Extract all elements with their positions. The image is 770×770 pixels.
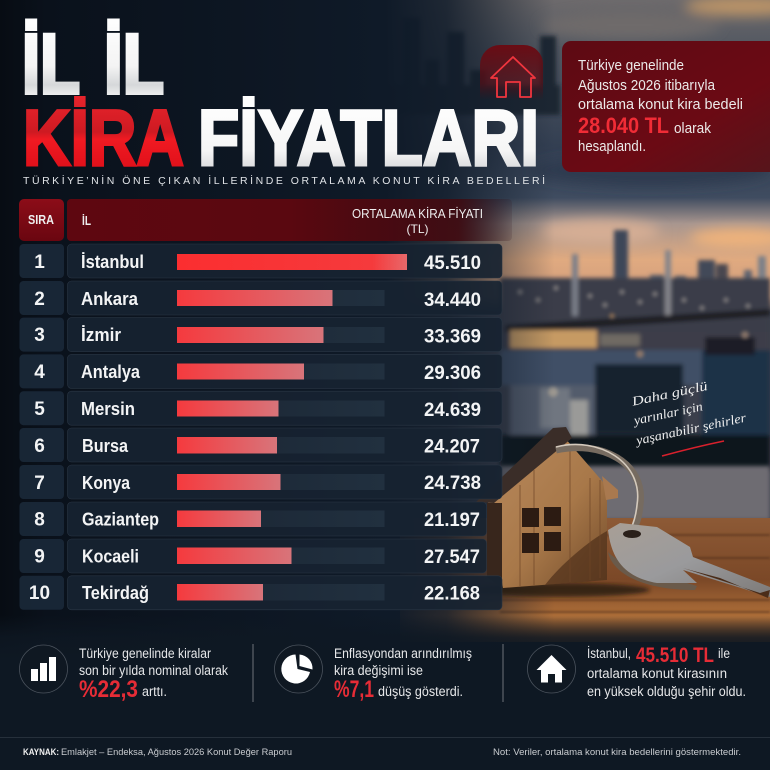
- row 9 Kocaeli: [20, 539, 486, 573]
- title line: İL İL: İL: [22, 17, 80, 111]
- row 3 İzmir: İzmir: [81, 325, 121, 345]
- ranking table: [20, 244, 502, 610]
- row 3 İzmir: 3: [34, 325, 45, 346]
- stat 2: real rent change: [274, 645, 472, 703]
- icon: pie chart: [274, 645, 322, 693]
- title: [22, 17, 539, 182]
- table header: ORTALAMA KİRA FİYATI: [352, 207, 483, 221]
- row 3 İzmir: 33.369: [424, 326, 481, 348]
- handwritten slogan: Daha güçlü: [629, 378, 709, 409]
- table header: [19, 199, 512, 241]
- row 8 Gaziantep: Gaziantep: [82, 510, 159, 530]
- callout: national average: ortalama konut kira bedeli: [578, 97, 743, 113]
- stat 3: highest city: ile: [718, 646, 730, 661]
- row 6 Bursa: [20, 428, 502, 462]
- row 4 Antalya: 4: [34, 362, 45, 383]
- stat 3: highest city: 45.510 TL: [636, 644, 714, 667]
- title line: İL İL: İL: [104, 17, 164, 111]
- title line: KİRA FİYATLARI: [23, 93, 539, 182]
- row 4 Antalya: 29.306: [424, 362, 481, 384]
- footer: source: Emlakjet – Endeksa, Ağustos 2026 Konut Değer Raporu: [61, 747, 292, 758]
- callout: national average: Ağustos 2026 itibarıyla: [578, 78, 716, 94]
- city lights: [517, 285, 751, 397]
- row 2 Ankara: 2: [34, 289, 45, 310]
- row 7 Konya: 7: [34, 473, 45, 494]
- table header: İL: [82, 213, 91, 228]
- stat 3: highest city: ortalama konut kirasının: [587, 666, 727, 681]
- row 4 Antalya: [20, 354, 502, 388]
- footer: note: Not: Veriler, ortalama konut kira bedellerini göstermektedir.: [493, 747, 741, 758]
- callout: national average: [562, 41, 770, 172]
- row 5 Mersin: 5: [34, 399, 45, 420]
- key: [608, 523, 770, 598]
- row 6 Bursa: 6: [34, 436, 45, 457]
- footer: source: KAYNAK:: [23, 747, 59, 758]
- row 5 Mersin: [20, 391, 502, 425]
- handwritten slogan: yarınlar için: [630, 398, 704, 428]
- callout: national average: 28.040 TL: [578, 113, 669, 138]
- stat 1: nominal rent increase: %22,3: [79, 676, 138, 703]
- row 8 Gaziantep: 8: [34, 510, 45, 530]
- callout: national average: hesaplandı.: [578, 139, 646, 155]
- row 10 Tekirdağ: 10: [29, 583, 50, 604]
- row 5 Mersin: Mersin: [81, 399, 135, 419]
- photo: wooden house and key: [470, 427, 770, 598]
- subtitle: TÜRKİYE’NİN ÖNE ÇIKAN İLLERİNDE ORTALAMA KONUT KİRA BEDELLERİ: [23, 174, 545, 187]
- row 10 Tekirdağ: Tekirdağ: [82, 583, 149, 603]
- icon: bar chart: [20, 645, 68, 693]
- stat 2: real rent change: %7,1: [334, 676, 374, 703]
- stat 3: highest city: en yüksek olduğu şehir oldu.: [587, 684, 746, 699]
- stat 1: nominal rent increase: Türkiye genelinde kiralar: [79, 646, 211, 661]
- row 1 İstanbul: 45.510: [424, 252, 481, 274]
- callout: national average: Türkiye genelinde: [578, 58, 684, 74]
- row 2 Ankara: [20, 281, 502, 315]
- callout: national average: olarak: [674, 121, 712, 137]
- stat 3: highest city: [528, 644, 746, 699]
- row 6 Bursa: 24.207: [424, 436, 480, 458]
- row 10 Tekirdağ: 22.168: [424, 582, 480, 604]
- divider: [252, 644, 254, 702]
- table header: SIRA: [28, 213, 54, 227]
- icon: house outline on red tile: [480, 45, 543, 100]
- row 5 Mersin: 24.639: [424, 399, 481, 421]
- stat 1: nominal rent increase: son bir yılda nominal olarak: [79, 663, 228, 678]
- row 7 Konya: 24.738: [424, 472, 481, 494]
- stat 3: highest city: İstanbul,: [587, 646, 631, 661]
- row 1 İstanbul: İstanbul: [81, 252, 144, 272]
- row 8 Gaziantep: 21.197: [424, 509, 480, 531]
- handwritten slogan: yaşanabilir şehirler: [632, 410, 748, 448]
- title line: KİRA FİYATLARI: FİYATLARI: [198, 93, 539, 182]
- row 7 Konya: Konya: [82, 473, 131, 493]
- row 1 İstanbul: [20, 244, 502, 278]
- stat 1: nominal rent increase: [20, 645, 228, 703]
- row 2 Ankara: Ankara: [81, 289, 139, 309]
- footer rule: [0, 737, 770, 738]
- icon: house: [528, 645, 576, 693]
- row 9 Kocaeli: 27.547: [424, 546, 480, 568]
- row 4 Antalya: Antalya: [81, 362, 141, 382]
- row 9 Kocaeli: 9: [34, 546, 45, 568]
- row 10 Tekirdağ: [20, 576, 502, 610]
- house windows: [522, 507, 561, 553]
- house body: [488, 430, 616, 588]
- slogan underline: [662, 441, 724, 456]
- key ring: [556, 448, 641, 534]
- stat 1: nominal rent increase: arttı.: [142, 684, 167, 699]
- row 7 Konya: [20, 465, 502, 499]
- row 6 Bursa: Bursa: [82, 436, 129, 456]
- row 1 İstanbul: 1: [34, 252, 45, 273]
- row 2 Ankara: 34.440: [424, 289, 481, 311]
- row 3 İzmir: [20, 318, 502, 352]
- stat 2: real rent change: düşüş gösterdi.: [378, 684, 463, 699]
- row 8 Gaziantep: [20, 502, 486, 536]
- stat 2: real rent change: kira değişimi ise: [334, 663, 423, 678]
- title line: İL İL: [22, 17, 164, 111]
- stat 2: real rent change: Enflasyondan arındırılmış: [334, 646, 472, 661]
- row 9 Kocaeli: Kocaeli: [82, 546, 139, 566]
- title line: KİRA FİYATLARI: KİRA: [23, 93, 184, 182]
- divider: [502, 644, 504, 702]
- handwritten slogan: [624, 371, 748, 448]
- table header: (TL): [406, 222, 428, 236]
